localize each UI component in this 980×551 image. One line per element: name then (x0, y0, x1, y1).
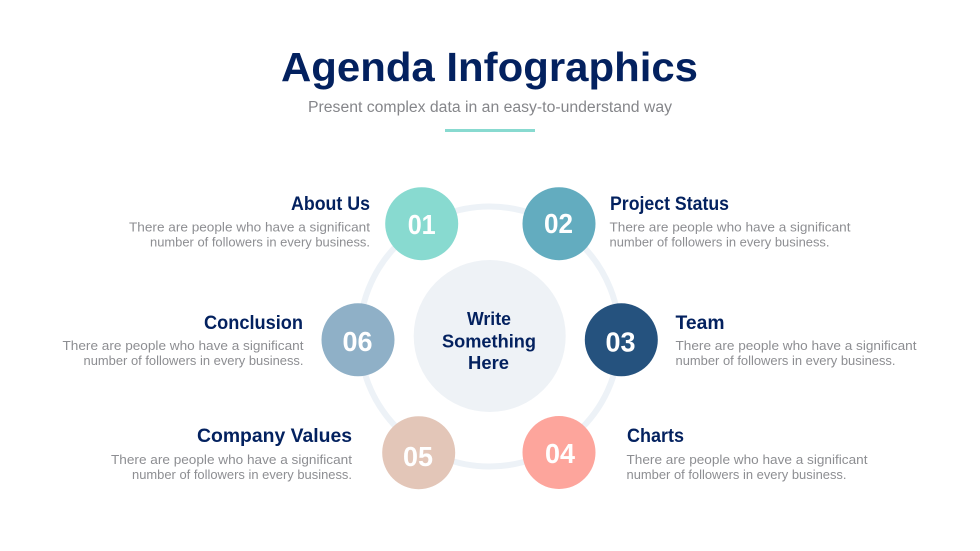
text block: Conclusion: Conclusion (204, 313, 303, 334)
node 05 (382, 416, 455, 489)
text block: Project Status: Project Status (610, 194, 729, 215)
text block: Team: Team (676, 313, 724, 334)
node 04: 04 (545, 438, 575, 469)
title: Agenda Infographics (281, 44, 698, 90)
text block: Company Values: There are people who have a significant (111, 452, 352, 467)
node 04 (522, 416, 596, 489)
text block: Conclusion (62, 313, 304, 368)
text block: Project Status: There are people who have a significant (610, 220, 851, 234)
node 06 (322, 303, 394, 376)
subtitle: Present complex data in an easy-to-understand way (308, 99, 672, 116)
text block: Charts: Charts (627, 426, 684, 447)
centre circle (414, 260, 566, 412)
text block: Team (676, 313, 917, 368)
node 03 (585, 303, 658, 376)
node 02 (522, 187, 596, 260)
text block: Team: number of followers in every business. (676, 353, 896, 368)
node 06: 06 (342, 326, 372, 357)
text block: Conclusion: There are people who have a significant (62, 338, 304, 353)
node 02: 02 (544, 208, 573, 239)
connecting ring (360, 206, 620, 466)
title underline (445, 129, 535, 132)
text block: Charts: number of followers in every business. (626, 467, 846, 482)
text block: Charts: There are people who have a significant (626, 452, 868, 467)
node 05: 05 (403, 441, 433, 472)
text block: About Us (129, 194, 370, 250)
text block: Conclusion: number of followers in every business. (84, 353, 304, 368)
text block: Project Status (610, 194, 851, 250)
text block: Team: There are people who have a significant (676, 338, 917, 353)
text block: Charts (626, 426, 868, 482)
text block: Company Values: Company Values (197, 426, 352, 447)
centre circle: Here (468, 352, 509, 373)
text block: About Us: About Us (291, 194, 370, 215)
text block: About Us: There are people who have a significant (129, 220, 370, 234)
node 01: 01 (408, 209, 436, 240)
node 01 (385, 187, 458, 260)
node 03: 03 (606, 326, 636, 358)
text block: About Us: number of followers in every business. (150, 234, 370, 250)
centre circle: Write (467, 308, 511, 329)
text block: Company Values: number of followers in every business. (132, 467, 352, 482)
text block: Company Values (111, 426, 352, 482)
text block: Project Status: number of followers in every business. (610, 234, 830, 250)
centre circle: Something (442, 330, 536, 352)
